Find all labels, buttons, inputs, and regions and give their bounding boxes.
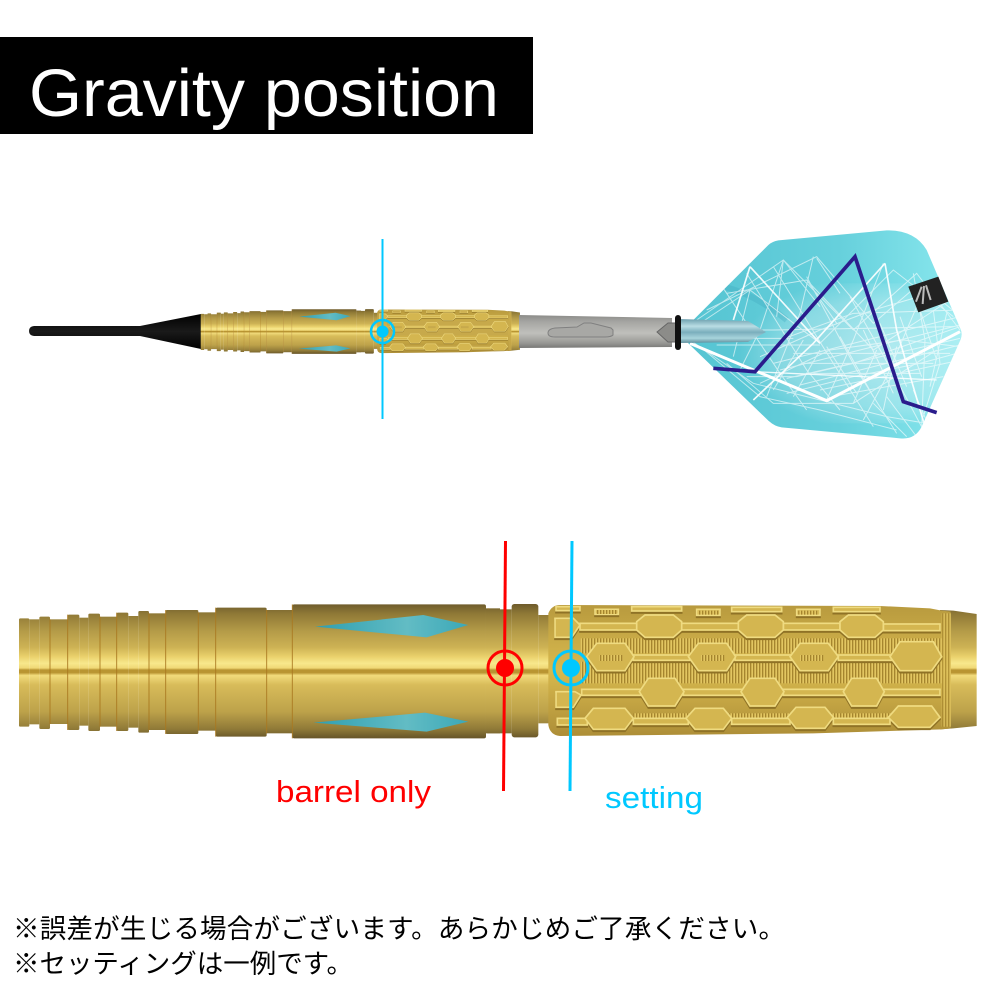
shaft xyxy=(519,315,676,348)
setting marker xyxy=(554,541,588,791)
large barrel close-up xyxy=(19,604,977,738)
flight xyxy=(688,230,980,439)
footnotes: ※誤差が生じる場合がございます。あらかじめご了承ください。 xyxy=(13,914,785,944)
small gravity marker xyxy=(371,239,394,419)
barrel only marker xyxy=(488,541,522,791)
title banner: Gravity position xyxy=(29,56,499,131)
footnotes xyxy=(13,914,785,979)
flight stem xyxy=(675,315,766,350)
dart tip xyxy=(29,314,201,349)
full dart illustration xyxy=(29,230,980,439)
small barrel xyxy=(201,309,520,354)
label: setting: setting xyxy=(605,780,703,815)
label: barrel only: barrel only xyxy=(276,774,432,809)
flight logo xyxy=(908,277,948,312)
footnotes: ※セッティングは一例です。 xyxy=(13,949,353,979)
title banner xyxy=(0,37,533,134)
